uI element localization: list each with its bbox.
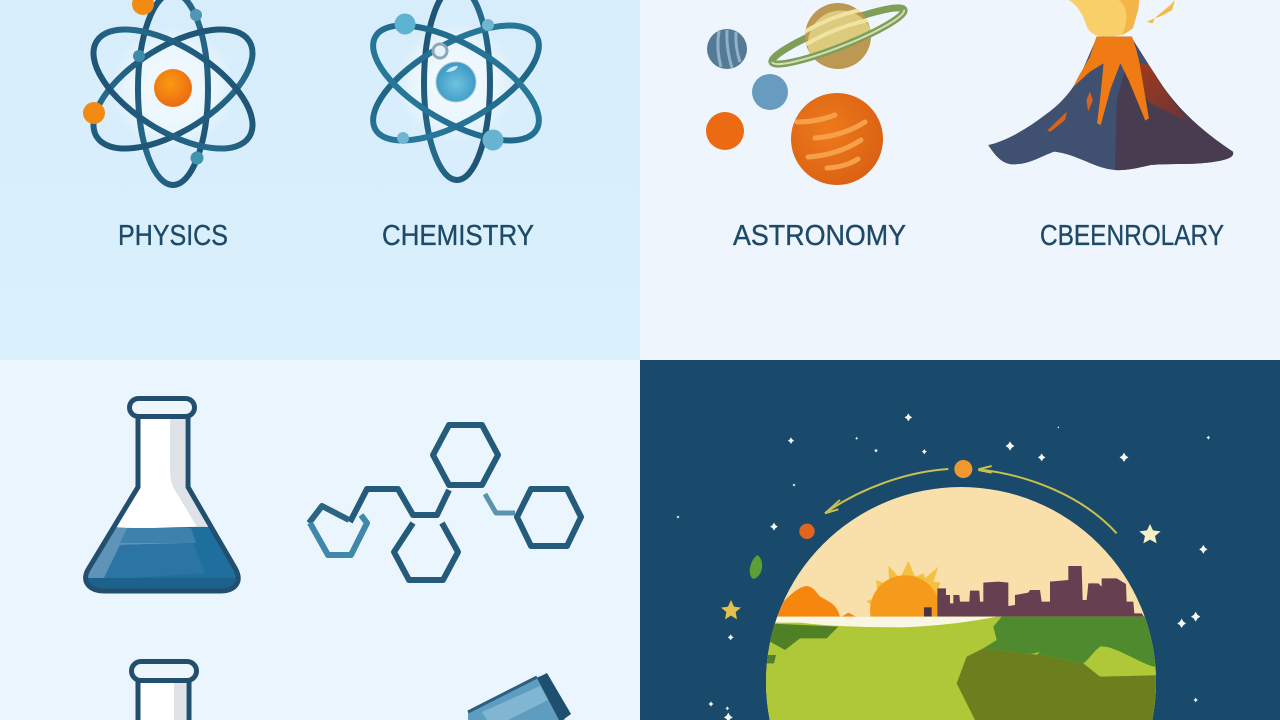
sun, moons and orbit arrows — [721, 460, 1161, 619]
icon: planets — [706, 0, 916, 185]
icon: volcano — [988, 0, 1233, 170]
icon: telescope, cropped — [468, 673, 571, 720]
city skyline — [937, 566, 1144, 617]
illustration: earth globe — [750, 480, 1167, 720]
panel: earth and sky — [640, 360, 1280, 720]
stars — [676, 413, 1210, 720]
label: garbled geology heading: CBEENROLARY — [1040, 220, 1224, 252]
label: physics: PHYSICS — [118, 220, 228, 252]
label: chemistry: CHEMISTRY — [382, 220, 534, 252]
icon: second flask, cropped — [132, 662, 196, 720]
icon: molecule structure — [309, 425, 581, 580]
panel: physics and chemistry — [0, 0, 640, 360]
orange hills — [776, 586, 856, 617]
panel: lab equipment — [0, 360, 640, 720]
icon: physics atom — [74, 0, 272, 185]
land — [750, 617, 1167, 720]
setting sun — [866, 561, 941, 617]
panel: astronomy and geology — [706, 0, 1234, 246]
label: astronomy: ASTRONOMY — [733, 220, 906, 252]
icon: chemistry atom — [356, 0, 556, 180]
icon: flask — [86, 398, 238, 591]
